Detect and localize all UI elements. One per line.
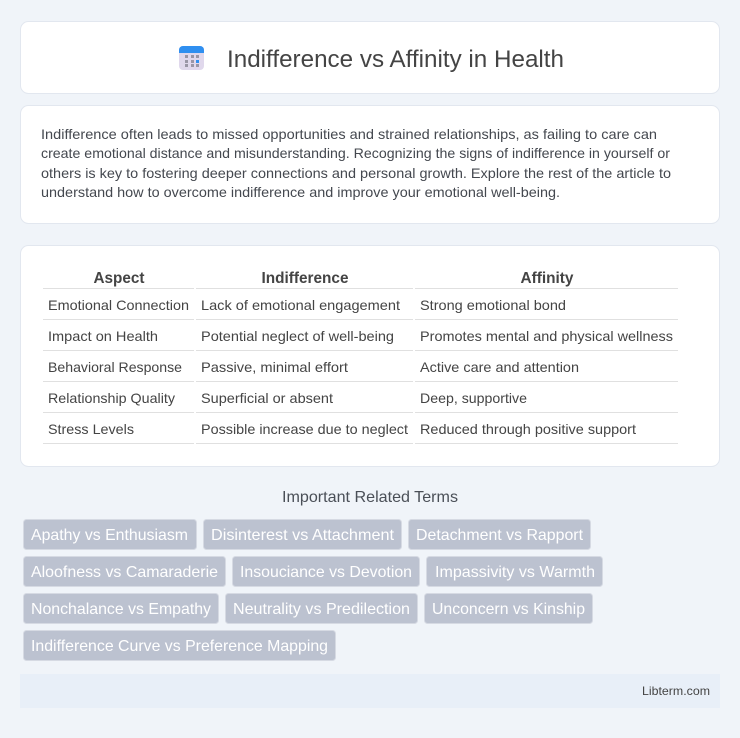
table header: Affinity: [520, 270, 574, 287]
tag: [24, 630, 336, 660]
row: emotional connection: Lack of emotional engagement: [201, 297, 400, 313]
intro text: Indifference often leads to missed opportunities and strained relationships, as failing to care can: [41, 126, 657, 142]
footer credit: Libterm.com: [642, 684, 710, 698]
footer: [20, 674, 720, 708]
tag: [226, 594, 418, 624]
row: stress levels: Stress Levels: [48, 421, 134, 437]
row: stress levels: Reduced through positive support: [420, 421, 636, 437]
tag: Neutrality vs Predilection: [233, 601, 410, 618]
heading: important related terms: Important Related Terms: [282, 489, 458, 506]
panel: comparison table: [20, 246, 720, 466]
intro text: create emotional distance and misunderstanding. Recognizing the signs of indifference in yourself or: [41, 145, 670, 161]
intro text: [41, 126, 671, 200]
intro text: understand how to overcome indifference and improve your emotional well-being.: [41, 184, 560, 200]
row: relationship quality: Deep, supportive: [420, 390, 527, 406]
related term tags: [24, 520, 602, 660]
panel: introduction: [20, 106, 720, 224]
tag: Indifference Curve vs Preference Mapping: [31, 638, 328, 655]
tag: [24, 594, 218, 624]
tag: Insouciance vs Devotion: [240, 564, 412, 581]
row: emotional connection: [48, 297, 566, 313]
row: impact on health: [48, 328, 673, 344]
tag: [24, 556, 226, 586]
icon: calendar: [179, 46, 204, 70]
tag: [204, 520, 402, 550]
tag: Nonchalance vs Empathy: [31, 601, 211, 618]
row: behavioral response: [48, 359, 579, 375]
tag: [232, 556, 420, 586]
row: stress levels: Possible increase due to neglect: [201, 421, 408, 437]
tag: Aloofness vs Camaraderie: [31, 564, 218, 581]
table header: [94, 270, 574, 287]
tag: [424, 594, 592, 624]
tag: [408, 520, 590, 550]
tag: [426, 556, 602, 586]
row: impact on health: Promotes mental and physical wellness: [420, 328, 673, 344]
row: behavioral response: Active care and attention: [420, 359, 579, 375]
table header: Aspect: [94, 270, 145, 287]
row: relationship quality: Relationship Quality: [48, 390, 175, 406]
row: emotional connection: Strong emotional bond: [420, 297, 566, 313]
panel: header: [20, 22, 720, 94]
tag: Detachment vs Rapport: [416, 527, 584, 544]
row: emotional connection: Emotional Connection: [48, 297, 189, 313]
intro text: others is key to fostering deeper connections and personal growth. Explore the rest of the article to: [41, 165, 671, 181]
row: relationship quality: [48, 390, 527, 406]
tag: Impassivity vs Warmth: [435, 564, 595, 581]
tag: Disinterest vs Attachment: [211, 527, 395, 544]
row: behavioral response: Passive, minimal effort: [201, 359, 348, 375]
row: impact on health: Potential neglect of well-being: [201, 328, 394, 344]
row: relationship quality: Superficial or absent: [201, 390, 333, 406]
row: behavioral response: Behavioral Response: [48, 359, 182, 375]
tag: Unconcern vs Kinship: [432, 601, 585, 618]
tag: Apathy vs Enthusiasm: [31, 527, 188, 544]
row: impact on health: Impact on Health: [48, 328, 158, 344]
title: Indifference vs Affinity in Health: [227, 46, 564, 73]
table header: Indifference: [262, 270, 349, 287]
tag: [24, 520, 196, 550]
row: stress levels: [48, 421, 636, 437]
